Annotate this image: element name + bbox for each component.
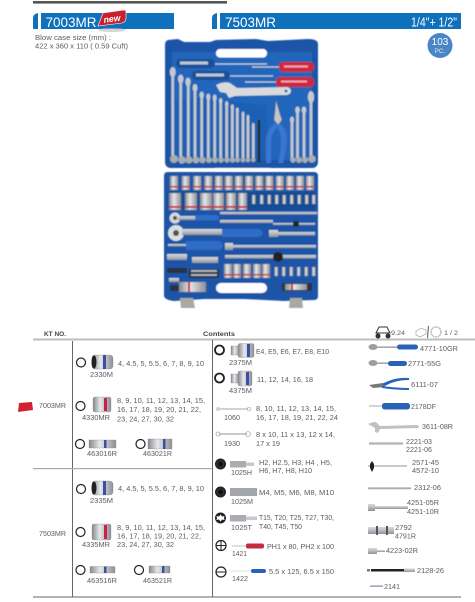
accessory: 2141 bar	[370, 584, 400, 591]
item: 463016R deep socket: 463016R	[87, 451, 117, 458]
accessory: 2178DF screwdriver	[369, 403, 436, 411]
accessory: 2221 extension bar: 2221-03	[406, 439, 432, 446]
item: 4375M torx socket: 4375M	[229, 388, 252, 395]
item: 2330M socket: 2330M	[90, 372, 113, 379]
item: 1025M spline bit: M4, M5, M6, M8, M10	[259, 490, 334, 497]
packing icons and value	[416, 326, 458, 338]
item: 4335MR socket: 16, 17, 18, 19, 20, 21, 22,	[117, 534, 201, 540]
item: 4330MR socket: 23, 24, 27, 30, 32	[117, 416, 174, 424]
accessory: universal joint: 4791R	[395, 534, 416, 540]
item: 2335M socket: 4, 4.5, 5, 5.5, 6, 7, 8, 9, 10	[118, 486, 204, 493]
accessory: 4223-02R adapter	[368, 548, 418, 555]
item: 1421 phillips screwdriver	[216, 540, 334, 558]
weight icon and value: 9.24	[391, 330, 405, 337]
accessory: universal joint: 2792	[395, 525, 412, 532]
item: 1421 phillips screwdriver: 1421	[232, 551, 247, 558]
item: 463516R deep socket: 463516R	[87, 578, 117, 585]
accessory: 4251 extension: 4251-05R	[407, 500, 439, 507]
accessory: 2771-55G ratchet	[368, 360, 441, 368]
row label: 7003MR: 7003MR	[39, 403, 66, 410]
accessory: 3611-08R adjustable wrench	[368, 422, 453, 433]
item: 1025H hex bit: H6, H7, H8, H10	[259, 468, 312, 475]
accessory: 2141 bar: 2141	[384, 584, 400, 591]
product photo: open tool case	[164, 39, 318, 308]
item: 463521R deep socket: 463521R	[143, 578, 172, 585]
piece count badge: 103	[432, 37, 449, 48]
accessory: 6111-07 pliers: 6111-07	[411, 382, 438, 389]
accessory: 2128-26 magnetic pick-up	[367, 568, 444, 575]
item: 2335M socket	[76, 481, 204, 505]
item: 463021R deep socket: 463021R	[143, 451, 172, 458]
item: 2335M socket: 2335M	[90, 498, 113, 505]
table header: Contents	[203, 331, 235, 338]
accessory: 2221 extension bar: 2221-06	[406, 447, 432, 454]
item: 1025T torx bit	[215, 512, 334, 532]
item: 2375M torx socket	[215, 344, 329, 367]
item: 4330MR socket: 16, 17, 18, 19, 20, 21, 22,	[117, 407, 201, 414]
case lid with hand tools	[165, 39, 318, 168]
item: 4335MR socket: 4335MR	[82, 542, 110, 549]
header: 7003MR	[33, 13, 174, 30]
item: 4330MR socket: 4330MR	[82, 415, 110, 422]
item: 463521R deep socket	[134, 566, 172, 585]
item: 1060 combination wrench: 16, 17, 18, 19, 21, 22, 24	[256, 415, 338, 422]
item: 1025T torx bit: T40, T45, T50	[259, 524, 302, 531]
accessory: 6111-07 pliers	[369, 378, 438, 390]
item: 2375M torx socket: 2375M	[229, 360, 252, 367]
item: 4375M torx socket	[215, 371, 313, 395]
row label: 7003MR	[18, 402, 66, 412]
piece count badge: PC.	[435, 48, 446, 55]
item: 1422 slotted screwdriver: 1422	[232, 576, 248, 583]
item: 1025T torx bit: T15, T20, T25, T27, T30,	[259, 515, 334, 522]
accessory: 2312-06 extension	[368, 485, 441, 492]
item: 4335MR socket	[76, 524, 205, 549]
item: 4335MR socket: 23, 24, 27, 30, 32	[117, 542, 174, 549]
accessory: 2771-55G ratchet: 2771-55G	[408, 361, 441, 368]
accessory: sliding T-bar: 2571-45	[412, 460, 439, 467]
item: 1060 combination wrench: 1060	[224, 415, 240, 422]
item: 1930 double ring wrench: 1930	[224, 441, 240, 448]
accessory: 4251 extension: 4251-10R	[407, 509, 439, 516]
accessory: 3611-08R adjustable wrench: 3611-08R	[422, 424, 453, 431]
accessory: 4771-10GR ratchet: 4771-10GR	[420, 346, 458, 353]
item: 1930 double ring wrench: 17 x 19	[256, 441, 280, 448]
item: 4335MR socket: 8, 9, 10, 11, 12, 13, 14, 15,	[117, 525, 205, 532]
blow case size note	[35, 35, 128, 50]
badge: new: new	[103, 13, 122, 25]
badge: new	[98, 10, 126, 32]
accessory: 2221 extension bar	[369, 439, 432, 454]
item: 463021R deep socket	[136, 439, 172, 458]
hinge strip	[215, 168, 270, 171]
case base with socket set	[164, 172, 318, 308]
header: 7503MR	[212, 13, 461, 30]
item: 1421 phillips screwdriver: PH1 x 80, PH2 x 100	[267, 544, 334, 551]
blow case size note: Blow case size (mm) :	[35, 35, 111, 42]
item: 2330M socket: 4, 4.5, 5, 5.5, 6, 7, 8, 9, 10	[118, 361, 204, 368]
item: 4375M torx socket: 11, 12, 14, 16, 18	[257, 377, 313, 384]
item: 1060 combination wrench: 8, 10, 11, 12, 13, 14, 15,	[256, 406, 336, 413]
item: 1422 slotted screwdriver	[216, 567, 334, 583]
accessory: universal joint	[368, 525, 416, 540]
header: 7503MR: 1/4"+ 1/2"	[411, 14, 457, 30]
item: 1060 combination wrench	[216, 406, 338, 422]
item: 1025H hex bit	[215, 458, 332, 477]
table rules	[33, 338, 475, 598]
piece count badge	[428, 33, 452, 58]
accessory: 2128-26 magnetic pick-up: 2128-26	[417, 568, 444, 575]
accessory: 2178DF screwdriver: 2178DF	[411, 404, 436, 411]
accessory: 4223-02R adapter: 4223-02R	[386, 548, 418, 555]
accessory: 4771-10GR ratchet	[368, 344, 458, 353]
top rule	[33, 1, 227, 4]
item: 2330M socket	[76, 355, 204, 379]
row label: 7503MR: 7503MR	[39, 531, 66, 538]
accessory: 4251 extension	[368, 500, 439, 516]
item: 1025H hex bit: H2, H2.5, H3, H4 , H5,	[259, 460, 332, 467]
weight icon and value	[376, 327, 405, 338]
item: 1025T torx bit: 1025T	[231, 525, 253, 532]
packing icons and value: 1 / 2	[444, 330, 458, 337]
item: 1025M spline bit	[215, 486, 334, 506]
item: 1025H hex bit: 1025H	[231, 470, 252, 477]
item: 2375M torx socket: E4, E5, E6, E7, E8, E10	[256, 349, 329, 356]
accessory: 2312-06 extension: 2312-06	[414, 485, 441, 492]
blow case size note: 422 x 360 x 110 ( 0.59 Cuft)	[35, 44, 128, 50]
item: 463016R deep socket	[76, 440, 117, 458]
item: 1930 double ring wrench	[216, 432, 335, 448]
item: 1025M spline bit: 1025M	[231, 499, 253, 506]
header: 7003MR: 7003MR	[46, 14, 96, 30]
item: 4330MR socket	[76, 397, 205, 424]
item: 4330MR socket: 8, 9, 10, 11, 12, 13, 14, 15,	[117, 398, 205, 405]
table header	[44, 331, 235, 338]
accessory: sliding T-bar	[368, 460, 439, 475]
header: 7503MR: 7503MR	[225, 14, 276, 30]
accessory: sliding T-bar: 4572-10	[412, 468, 439, 475]
item: 463516R deep socket	[76, 566, 117, 585]
item: 1930 double ring wrench: 8 x 10, 11 x 13, 12 x 14,	[256, 432, 335, 439]
table header: KT NO.	[44, 331, 66, 338]
item: 1422 slotted screwdriver: 5.5 x 125, 6.5 x 150	[269, 569, 334, 576]
